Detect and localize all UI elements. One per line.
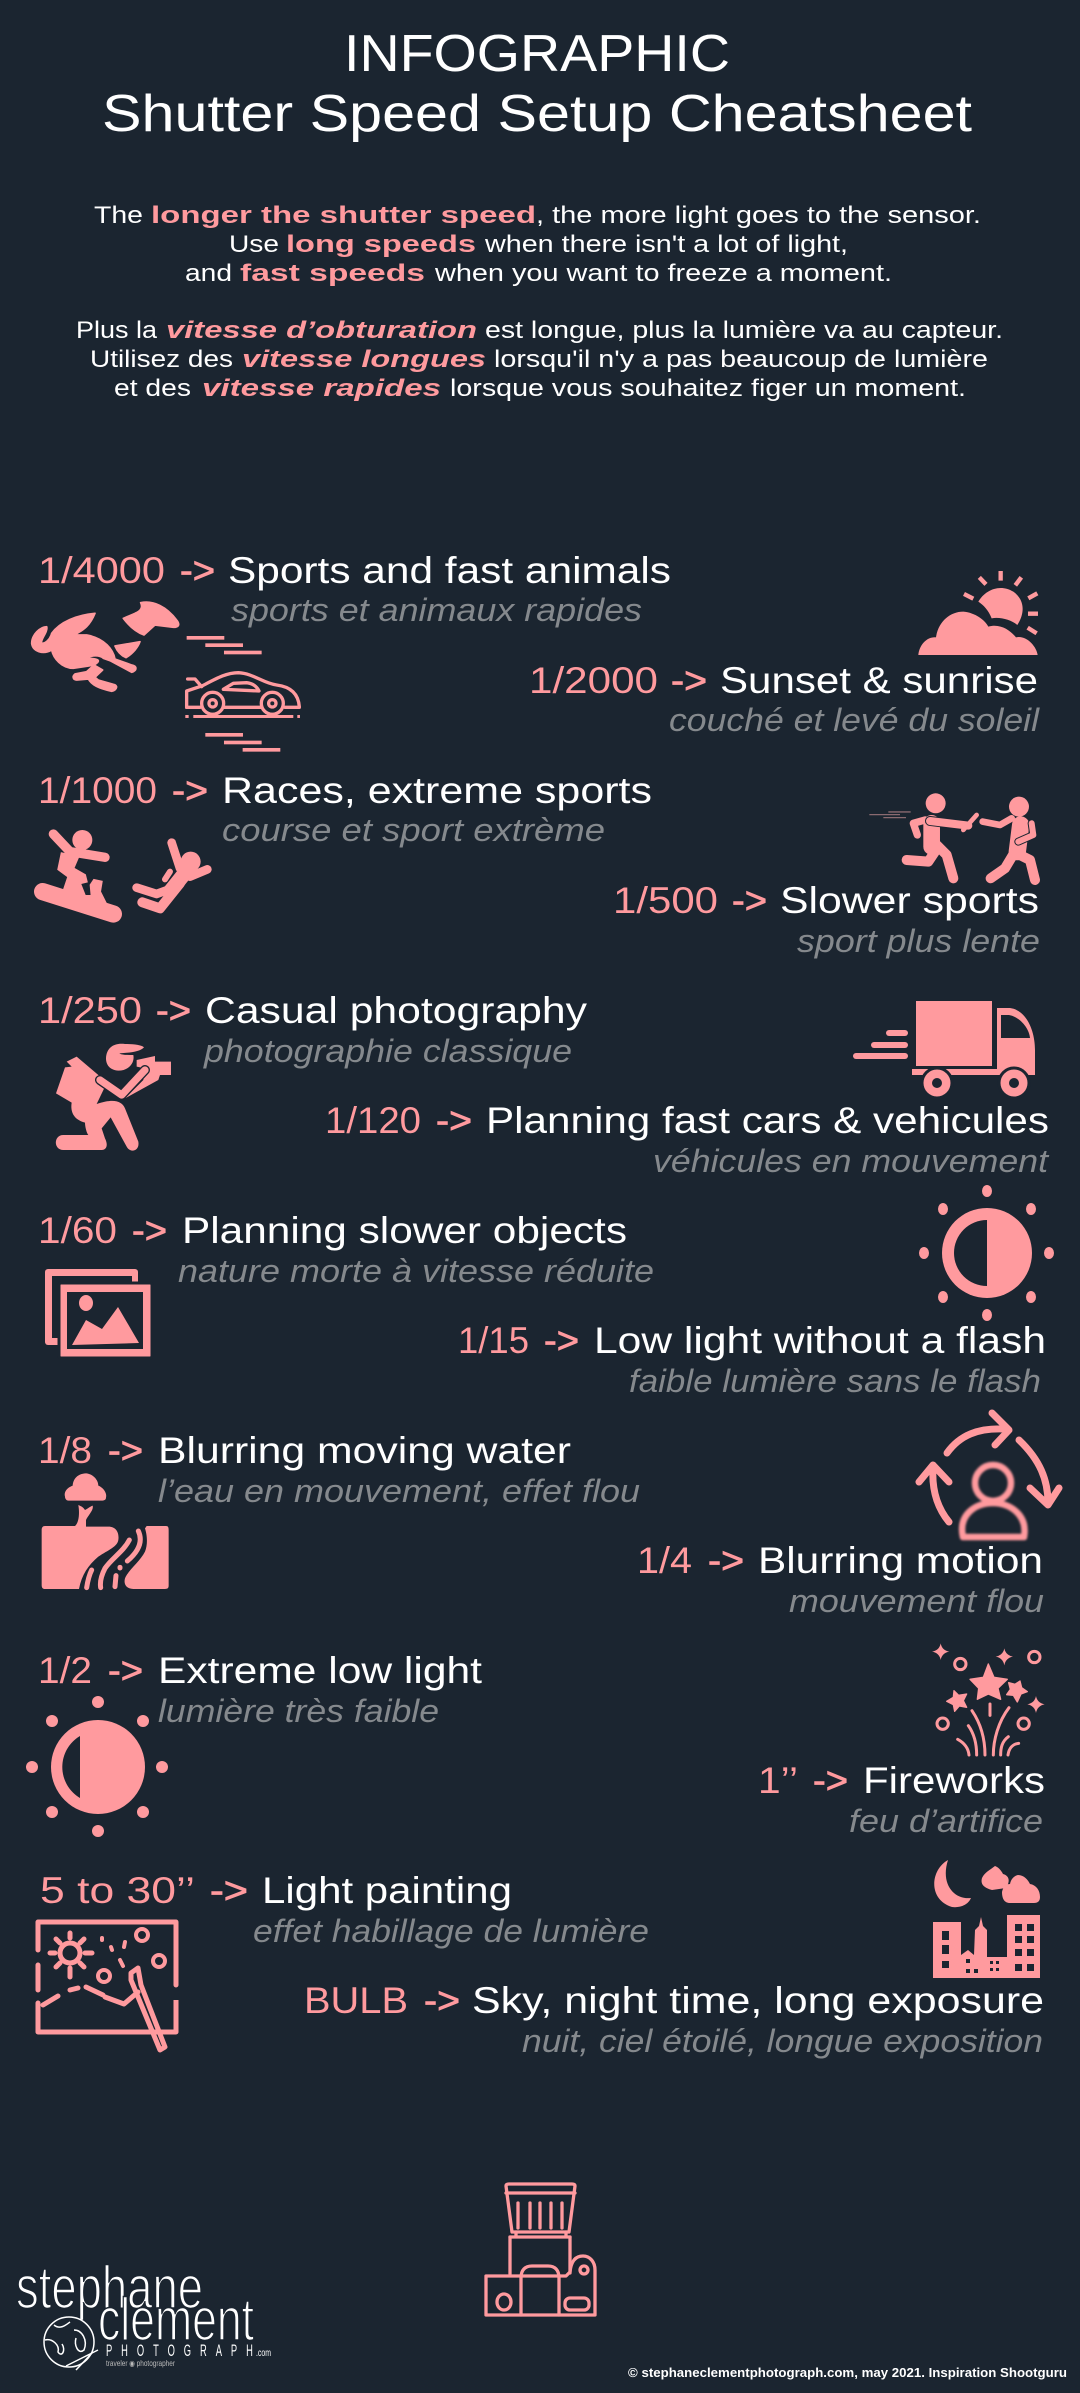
row: 5 to 30 seconds light painting: effet habillage de lumière: [253, 1913, 649, 1949]
copyright: © stephaneclementphotograph.com, may 2021. Inspiration Shootguru: [628, 2365, 1067, 2380]
row: 1/120 planning fast cars and vehicules: véhicules en mouvement: [653, 1143, 1050, 1179]
row: 1/60 planning slower objects: [38, 1210, 654, 1289]
intro text: English: long speeds: [286, 231, 476, 258]
row: 1/500 slower sports: sport plus lente: [797, 923, 1040, 959]
row: 1/8 blurring moving water: 1/8: [38, 1430, 92, 1471]
intro text: French: lorsque vous souhaitez figer un moment.: [450, 375, 966, 402]
row: 1/15 low light without a flash: [458, 1320, 1046, 1399]
title: [102, 25, 973, 143]
row: 5 to 30 seconds light painting: Light painting: [262, 1870, 512, 1911]
intro text: French: vitesse rapides: [202, 375, 441, 402]
logo: stephane clement photograph: traveler ◉ photographer: [106, 2359, 175, 2368]
row: 5 to 30 seconds light painting: 5 to 30’’: [40, 1870, 195, 1911]
row: bulb sky, night time, long exposure: nuit, ciel étoilé, longue exposition: [522, 2023, 1043, 2059]
icon: waterfall under a cloud: [42, 1473, 169, 1589]
logo: stephane clement photograph: stephane: [16, 2254, 203, 2321]
icon: mostly filled exposure sun: [26, 1696, 168, 1837]
row: bulb sky, night time, long exposure: Sky, night time, long exposure: [472, 1980, 1044, 2021]
icon: fast car: [185, 636, 300, 752]
icon: fireworks: [932, 1643, 1045, 1755]
row: 1/15 low light without a flash: Low light without a flash: [594, 1320, 1046, 1361]
icon: stacked photos: [45, 1269, 152, 1358]
intro text: English: and: [185, 260, 232, 287]
intro text: English: longer the shutter speed: [151, 202, 536, 229]
icon: kneeling photographer: [56, 1044, 171, 1151]
logo: stephane clement photograph: clement: [98, 2286, 254, 2353]
row: 1/2 extreme low light: ->: [108, 1650, 143, 1691]
row: 1/4 blurring motion: 1/4: [637, 1540, 692, 1581]
row: 1/15 low light without a flash: faible lumière sans le flash: [629, 1363, 1041, 1399]
row: 1/4 blurring motion: mouvement flou: [789, 1583, 1044, 1619]
row: 1/4 blurring motion: Blurring motion: [758, 1540, 1043, 1581]
intro text: English: [94, 202, 981, 287]
row: 1/1000 races, extreme sports: 1/1000: [38, 770, 157, 811]
intro text: French: Plus la: [76, 317, 158, 344]
row: 1/500 slower sports: ->: [732, 880, 767, 921]
icon: half-filled exposure sun: [919, 1185, 1054, 1321]
row: 1/2000 sunset and sunrise: Sunset & sunrise: [720, 660, 1038, 701]
intro text: French: et des: [114, 375, 191, 402]
row: 1 second fireworks: Fireworks: [863, 1760, 1045, 1801]
row: 1/120 planning fast cars and vehicules: ->: [436, 1100, 472, 1141]
row: 1/4000 sports and fast animals: [38, 550, 671, 628]
row: 1/2000 sunset and sunrise: ->: [671, 660, 707, 701]
row: 1/500 slower sports: Slower sports: [780, 880, 1039, 921]
title: Shutter Speed Setup Cheatsheet: [102, 85, 973, 143]
row: 1/4 blurring motion: [637, 1540, 1044, 1619]
logo: stephane clement photograph: [16, 2254, 271, 2370]
icon: sun behind cloud: [918, 571, 1038, 655]
intro text: French: est longue, plus la lumière va au capteur.: [485, 317, 1003, 344]
row: 1/4000 sports and fast animals: Sports and fast animals: [228, 550, 671, 591]
row: 1 second fireworks: 1’’: [758, 1760, 798, 1801]
intro text: English: fast speeds: [240, 260, 425, 287]
row: 1/8 blurring moving water: ->: [108, 1430, 143, 1471]
row: 1/8 blurring moving water: [38, 1430, 640, 1509]
row: 1/250 casual photography: Casual photography: [205, 990, 588, 1031]
row: bulb sky, night time, long exposure: [304, 1980, 1044, 2059]
intro text: English: when there isn't a lot of light,: [484, 231, 848, 258]
row: 1 second fireworks: ->: [813, 1760, 848, 1801]
logo: stephane clement photograph: .com: [256, 2348, 271, 2359]
intro text: English: Use: [229, 231, 279, 258]
row: 1/250 casual photography: 1/250: [38, 990, 142, 1031]
row: 1/2000 sunset and sunrise: [529, 660, 1040, 738]
row: 1/8 blurring moving water: Blurring moving water: [158, 1430, 571, 1471]
icon: relay runners: [869, 793, 1035, 880]
row: 1/250 casual photography: ->: [156, 990, 191, 1031]
icon: night city with moon and clouds: [933, 1860, 1040, 1978]
row: 5 to 30 seconds light painting: ->: [210, 1870, 248, 1911]
row: 1/15 low light without a flash: 1/15: [458, 1320, 529, 1361]
row: 1/500 slower sports: [613, 880, 1040, 959]
row: 1/2000 sunset and sunrise: couché et levé du soleil: [669, 702, 1040, 738]
row: 1/2 extreme low light: lumière très faible: [158, 1693, 439, 1729]
row: 1/1000 races, extreme sports: [38, 770, 652, 848]
row: 1/60 planning slower objects: nature morte à vitesse réduite: [178, 1253, 654, 1289]
row: 1/4000 sports and fast animals: ->: [180, 550, 215, 591]
intro text: English: , the more light goes to the sensor.: [536, 202, 981, 229]
row: 1/60 planning slower objects: Planning slower objects: [182, 1210, 627, 1251]
title: INFOGRAPHIC: [344, 25, 730, 83]
row: 1 second fireworks: [758, 1760, 1045, 1839]
row: 1/4000 sports and fast animals: 1/4000: [38, 550, 165, 591]
row: 5 to 30 seconds light painting: [40, 1870, 649, 1949]
icon: light painting frame and wand: [38, 1922, 180, 2050]
row: 1 second fireworks: feu d’artifice: [849, 1803, 1043, 1839]
row: 1/4000 sports and fast animals: sports et animaux rapides: [231, 592, 642, 628]
row: 1/1000 races, extreme sports: ->: [172, 770, 208, 811]
icon: camera from above: [486, 2184, 595, 2315]
row: 1/15 low light without a flash: ->: [544, 1320, 579, 1361]
row: 1/1000 races, extreme sports: Races, extreme sports: [222, 770, 652, 811]
intro text: French: vitesse longues: [242, 346, 486, 373]
row: 1/60 planning slower objects: 1/60: [38, 1210, 117, 1251]
row: 1/2000 sunset and sunrise: 1/2000: [529, 660, 658, 701]
icon: snowboarder and skydiver: [43, 830, 207, 914]
row: 1/60 planning slower objects: ->: [132, 1210, 167, 1251]
row: 1/1000 races, extreme sports: course et sport extrème: [222, 812, 605, 848]
intro text: French: Utilisez des: [90, 346, 233, 373]
intro text: English: The: [94, 202, 143, 229]
icon: delivery truck: [853, 1001, 1035, 1098]
intro text: English: when you want to freeze a moment.: [434, 260, 892, 287]
row: 1/2 extreme low light: [38, 1650, 483, 1729]
row: 1/120 planning fast cars and vehicules: [325, 1100, 1050, 1179]
row: bulb sky, night time, long exposure: ->: [424, 1980, 460, 2021]
row: bulb sky, night time, long exposure: BULB: [304, 1980, 408, 2021]
row: 1/120 planning fast cars and vehicules: Planning fast cars & vehicules: [486, 1100, 1049, 1141]
intro text: French: [76, 317, 1003, 402]
row: 1/2 extreme low light: Extreme low light: [158, 1650, 483, 1691]
row: 1/250 casual photography: [38, 990, 588, 1069]
row: 1/250 casual photography: photographie classique: [203, 1033, 572, 1069]
intro text: French: lorsqu'il n'y a pas beaucoup de lumière: [494, 346, 988, 373]
row: 1/500 slower sports: 1/500: [613, 880, 718, 921]
icon: running dog with toy: [32, 602, 179, 691]
row: 1/4 blurring motion: ->: [708, 1540, 744, 1581]
row: 1/8 blurring moving water: l’eau en mouvement, effet flou: [158, 1473, 640, 1509]
icon: person with motion arrows: [919, 1413, 1059, 1537]
logo: stephane clement photograph: PHOTOGRAPH: [106, 2341, 253, 2360]
row: 1/2 extreme low light: 1/2: [38, 1650, 92, 1691]
intro text: French: vitesse d’obturation: [166, 317, 477, 344]
row: 1/120 planning fast cars and vehicules: 1/120: [325, 1100, 421, 1141]
